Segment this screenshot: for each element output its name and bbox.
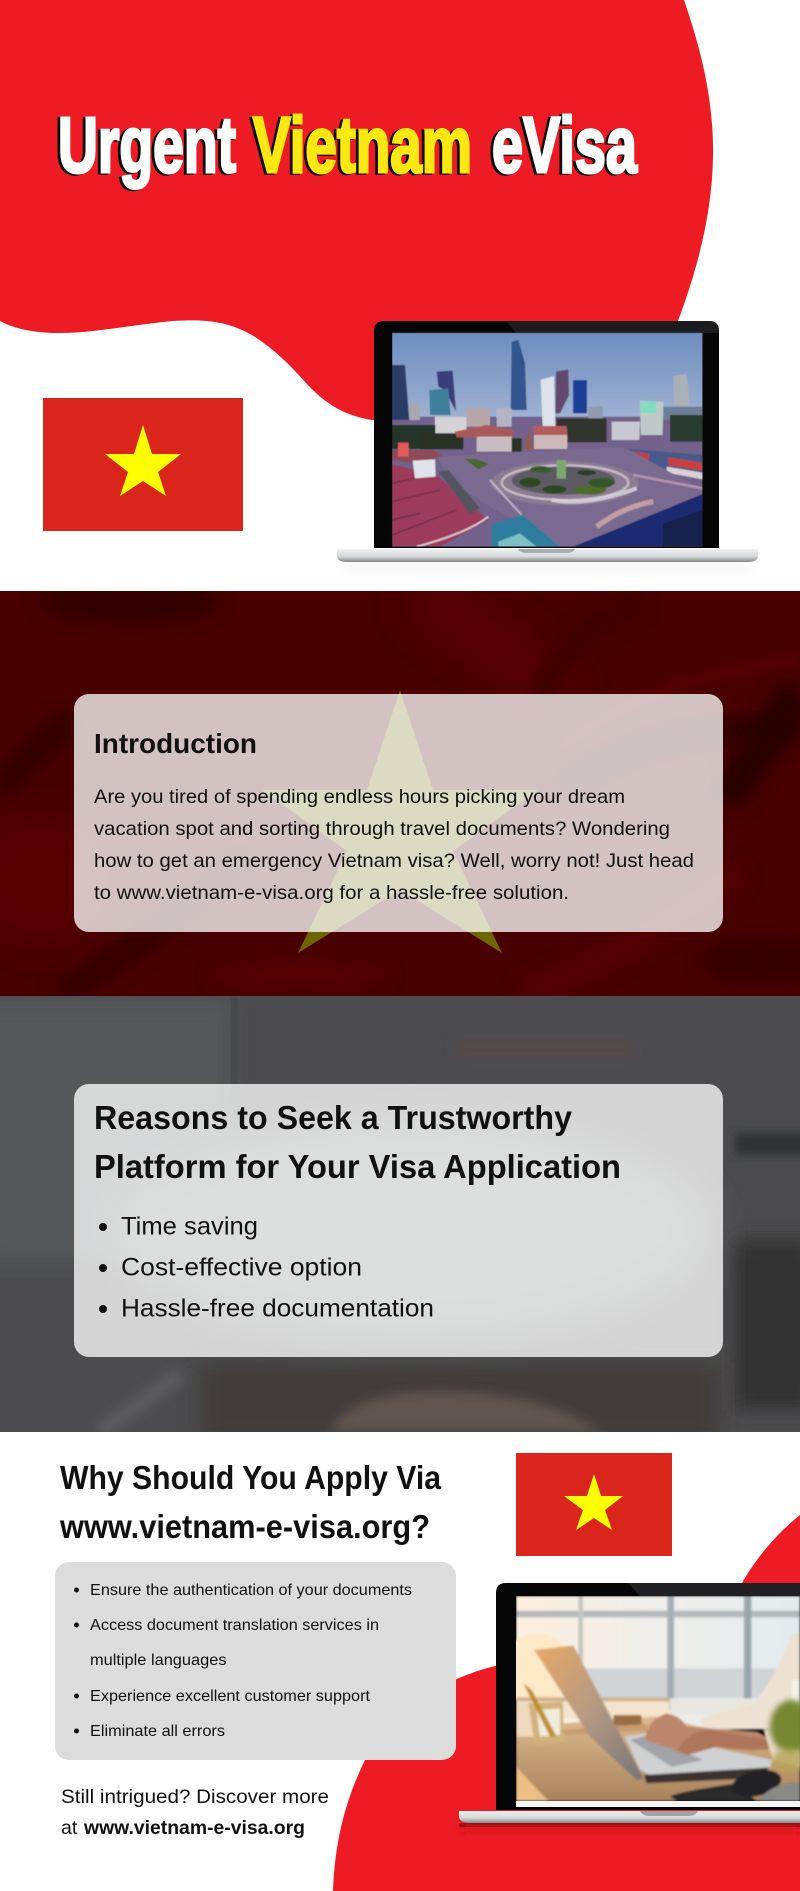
reasons list: Hassle-free documentation bbox=[121, 1294, 434, 1322]
heading: why apply: www.vietnam-e-visa.org? bbox=[59, 1508, 430, 1545]
title: Urgent bbox=[58, 100, 236, 189]
card: benefits list: Experience excellent customer support bbox=[90, 1688, 371, 1705]
title: eVisa bbox=[492, 100, 638, 189]
panel: hero background bbox=[0, 0, 800, 591]
laptop base bbox=[459, 1811, 800, 1834]
panel: introduction section bbox=[0, 576, 800, 996]
reasons list bbox=[99, 1212, 434, 1322]
title: Vietnam bbox=[250, 101, 469, 190]
city photo bbox=[392, 333, 703, 550]
title: Vietnam bbox=[253, 100, 472, 189]
flag fabric background bbox=[0, 576, 800, 996]
heading: reasons bbox=[94, 1099, 621, 1185]
card: benefits list: Access document translation services in bbox=[90, 1617, 379, 1634]
heading: why apply bbox=[59, 1459, 442, 1545]
white strip below photo bbox=[516, 1801, 800, 1807]
heading: reasons: Platform for Your Visa Application bbox=[94, 1148, 621, 1185]
heading: why apply: Why Should You Apply Via bbox=[60, 1459, 442, 1496]
red blob bottom bbox=[333, 1515, 800, 1891]
card: benefits list bbox=[55, 1562, 456, 1760]
card: benefits list: Ensure the authentication of your documents bbox=[90, 1582, 412, 1599]
card: benefits list: multiple languages bbox=[90, 1652, 226, 1669]
text card: introduction bbox=[74, 694, 723, 932]
reasons list: Cost-effective option bbox=[121, 1254, 362, 1282]
heading: Introduction: Introduction bbox=[94, 728, 257, 759]
laptop base bbox=[337, 549, 758, 562]
call to action text: at bbox=[61, 1817, 78, 1839]
faded star bbox=[262, 690, 538, 953]
title: eVisa bbox=[489, 101, 635, 190]
panel: reasons section bbox=[0, 996, 800, 1442]
heading: reasons: Reasons to Seek a Trustworthy bbox=[94, 1099, 573, 1136]
panel: why apply section bbox=[0, 1432, 800, 1891]
title bbox=[55, 100, 638, 190]
office photo bbox=[500, 1596, 800, 1801]
call to action text: www.vietnam-e-visa.org bbox=[83, 1817, 305, 1839]
laptop bezel bbox=[374, 321, 719, 548]
title: Urgent bbox=[55, 101, 233, 190]
intro paragraph: how to get an emergency Vietnam visa? Well, worry not! Just head bbox=[94, 850, 694, 872]
text card: reasons bbox=[74, 1084, 723, 1357]
intro paragraph: to www.vietnam-e-visa.org for a hassle-free solution. bbox=[94, 882, 569, 904]
red wave blob bbox=[0, 0, 713, 420]
intro paragraph: vacation spot and sorting through travel documents? Wondering bbox=[94, 818, 670, 840]
blurred photo background bbox=[0, 996, 800, 1442]
intro paragraph bbox=[94, 786, 694, 904]
laptop: person typing photo bbox=[459, 1583, 800, 1834]
card: benefits list: Eliminate all errors bbox=[90, 1723, 225, 1740]
laptop bezel bbox=[496, 1583, 800, 1810]
icon: Vietnam flag large bbox=[43, 398, 243, 531]
call to action text bbox=[61, 1786, 329, 1839]
laptop reflection bbox=[345, 562, 750, 574]
intro paragraph: Are you tired of spending endless hours picking your dream bbox=[94, 786, 625, 808]
laptop: Ho Chi Minh City photo bbox=[337, 321, 758, 574]
icon: Vietnam flag small bbox=[516, 1453, 672, 1556]
reasons list: Time saving bbox=[121, 1212, 258, 1240]
call to action text: Still intrigued? Discover more bbox=[61, 1786, 329, 1808]
